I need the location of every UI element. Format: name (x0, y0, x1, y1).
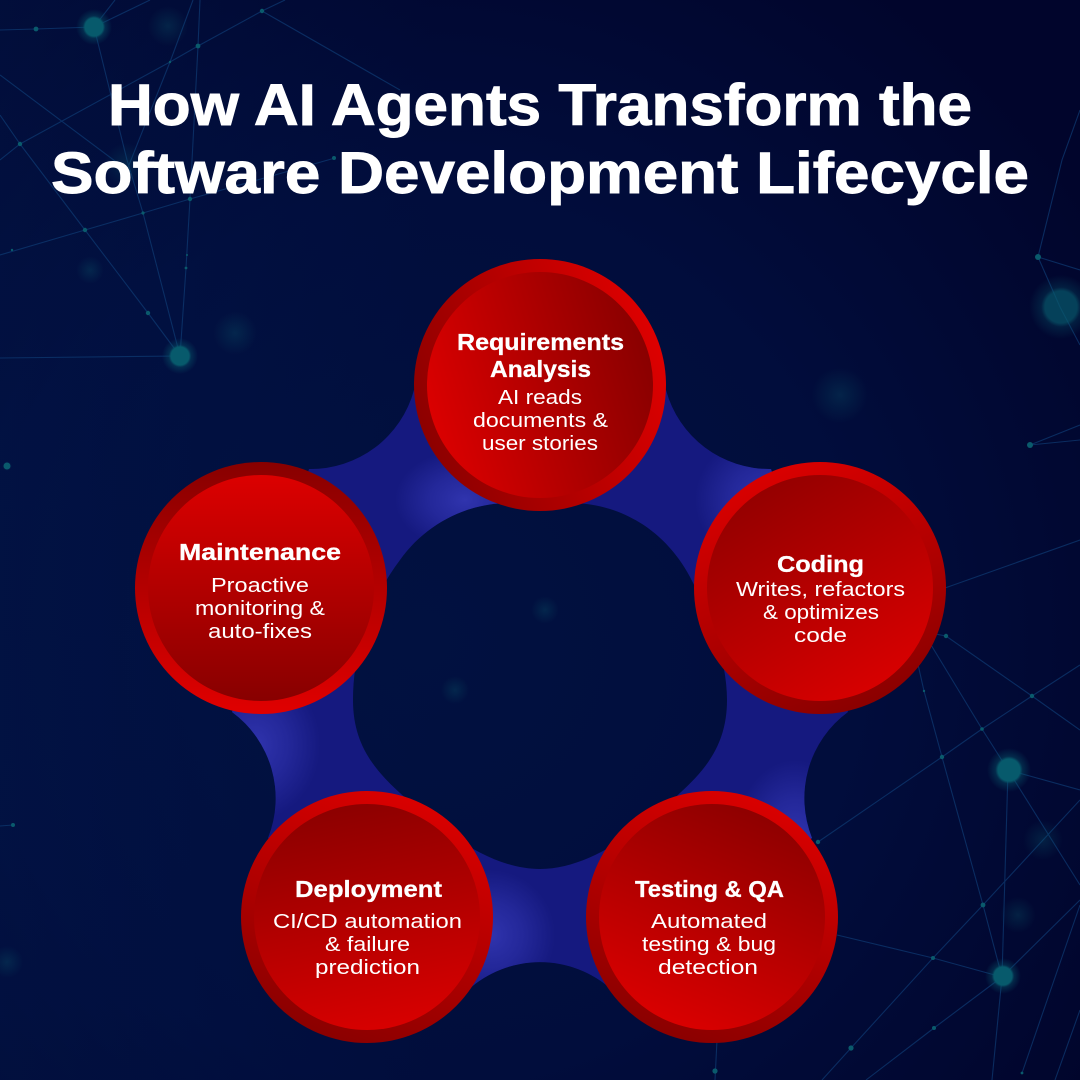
step: Coding: Coding (777, 551, 864, 577)
title: Software Development Lifecycle (51, 141, 1029, 206)
step: Maintenance: Proactive (211, 574, 309, 597)
step: Requirements Analysis: AI reads (498, 386, 582, 409)
step: Deployment (241, 791, 493, 1043)
step: Requirements Analysis: Analysis (490, 356, 591, 382)
step: Requirements Analysis: Requirements (457, 329, 624, 355)
step: Maintenance (135, 462, 387, 714)
title (51, 73, 1029, 206)
step: Testing & QA: testing & bug (642, 933, 776, 956)
step: Deployment: CI/CD automation (273, 910, 462, 933)
step: Requirements Analysis: user stories (482, 432, 598, 455)
step: Requirements Analysis (414, 259, 666, 511)
step: Deployment: Deployment (295, 876, 442, 902)
step: Testing & QA: Automated (651, 910, 767, 933)
step: Testing & QA: Testing & QA (635, 876, 784, 902)
title: How AI Agents Transform the (108, 73, 972, 138)
blue connector ring (232, 390, 848, 986)
step: Maintenance: auto-fixes (208, 620, 312, 643)
step: Coding: code (794, 624, 847, 647)
step: Testing & QA: detection (658, 956, 758, 979)
step: Coding (694, 462, 946, 714)
step: Coding: & optimizes (763, 601, 879, 624)
step: Maintenance: Maintenance (179, 539, 341, 565)
step: Requirements Analysis: documents & (473, 409, 608, 432)
step: Coding: Writes, refactors (736, 578, 905, 601)
step: Maintenance: monitoring & (195, 597, 325, 620)
step: Deployment: & failure (325, 933, 410, 956)
step: Deployment: prediction (315, 956, 420, 979)
step: Testing & QA (586, 791, 838, 1043)
